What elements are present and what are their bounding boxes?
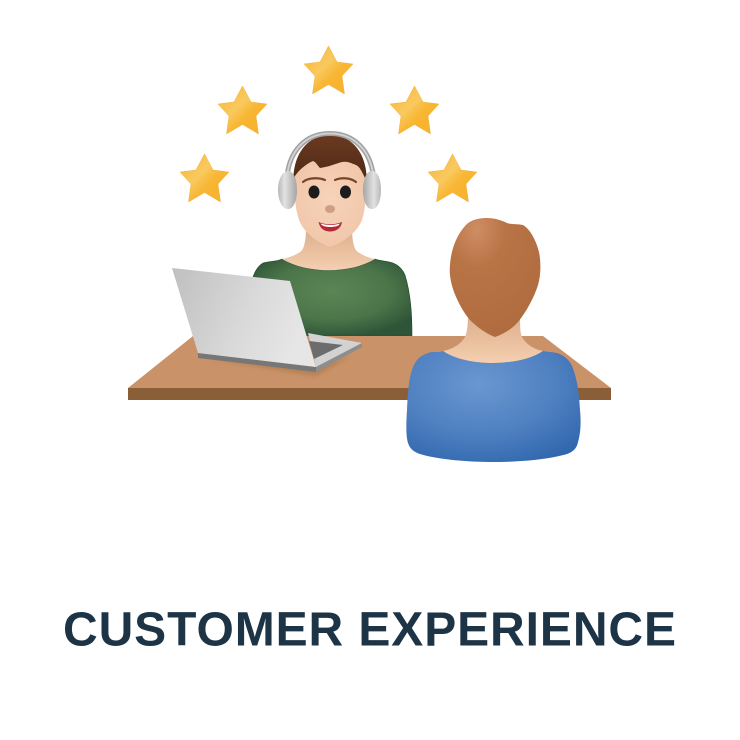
laptop hinge edge xyxy=(198,353,316,372)
table xyxy=(128,336,611,400)
laptop shadow xyxy=(205,356,350,376)
agent eyebrows xyxy=(303,178,356,182)
customer shirt xyxy=(406,351,581,462)
laptop base xyxy=(308,333,362,367)
laptop xyxy=(172,268,362,376)
headset left ear cup xyxy=(278,171,297,209)
agent nose xyxy=(325,205,335,213)
icon: star 2 xyxy=(218,86,267,134)
laptop base edge xyxy=(316,343,362,372)
agent mouth xyxy=(318,222,342,232)
icon: star 4 xyxy=(390,86,439,134)
agent eyes xyxy=(308,186,351,198)
icon: star 5 xyxy=(428,154,477,202)
customer hair xyxy=(450,218,540,337)
icon: star 3 xyxy=(304,46,353,94)
agent with headset xyxy=(252,134,412,336)
agent hair xyxy=(293,135,367,190)
headset band xyxy=(287,134,374,176)
agent neck xyxy=(282,228,375,270)
table top xyxy=(128,336,611,388)
agent face xyxy=(295,161,366,247)
headset right ear cup xyxy=(363,171,381,209)
icon: star 1 xyxy=(180,154,229,202)
laptop lid xyxy=(172,268,316,367)
customer seen from behind xyxy=(406,218,581,462)
title: CUSTOMER EXPERIENCE xyxy=(63,604,676,656)
agent shirt xyxy=(252,259,412,336)
customer neck xyxy=(443,315,543,363)
star rating arc xyxy=(180,46,477,202)
laptop keyboard area xyxy=(309,341,343,359)
table front edge xyxy=(128,388,611,400)
